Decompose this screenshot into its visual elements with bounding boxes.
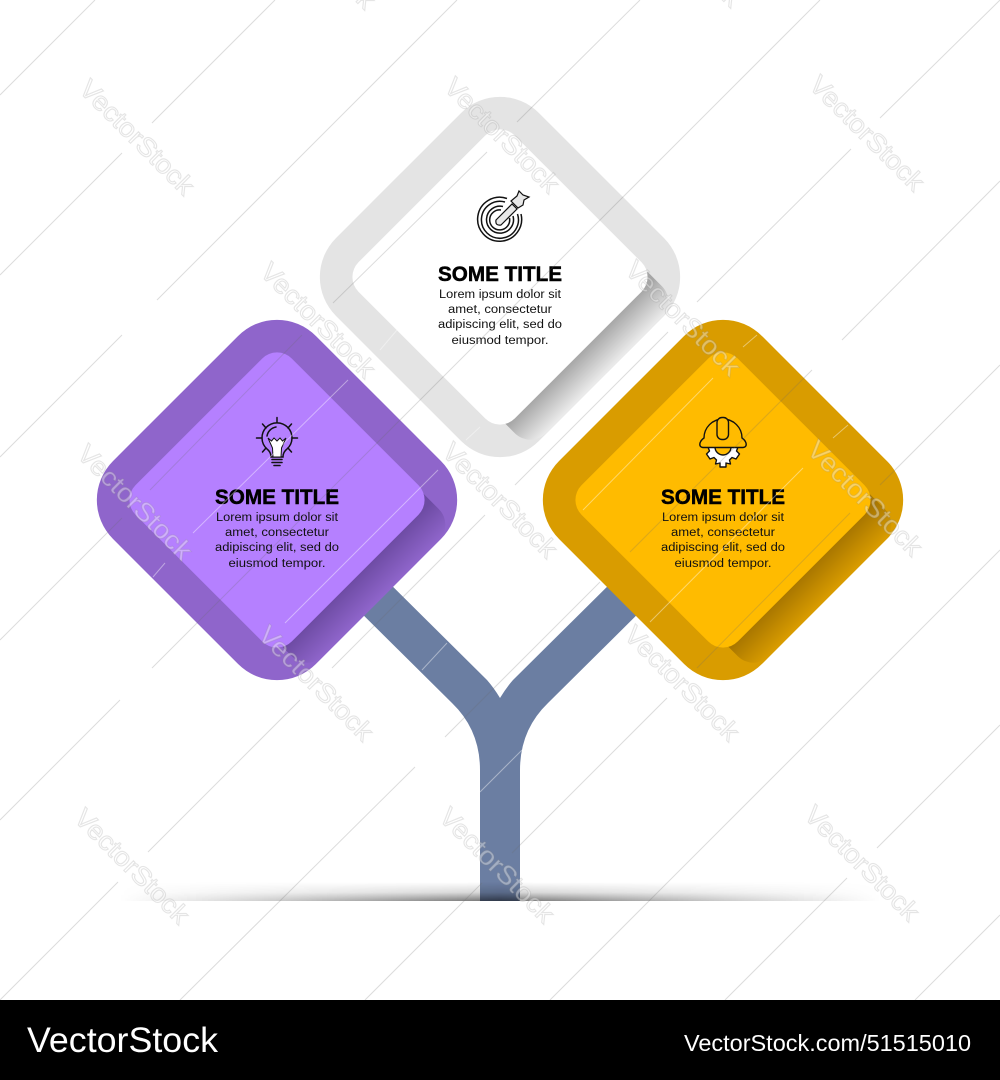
ground shadow (146, 884, 854, 901)
watermarks: VectorStock (801, 434, 929, 562)
inner shadow (249, 466, 454, 672)
panel: amber diamond (520, 297, 926, 703)
inner shadow (695, 466, 900, 672)
body (215, 512, 339, 570)
heading: SOME TITLE (438, 263, 562, 286)
body: amet, consectetur (448, 304, 552, 316)
body: amet, consectetur (671, 527, 775, 539)
text: right card (661, 486, 785, 570)
body: Lorem ipsum dolor sit (216, 512, 339, 524)
watermarks: VectorStock (798, 799, 926, 927)
body (661, 512, 785, 570)
inner shadow (472, 243, 677, 449)
watermarks: VectorStock (68, 802, 196, 930)
icon: light bulb (256, 418, 298, 466)
panel: grey diamond (297, 74, 703, 480)
icon: helmet and gear (700, 418, 746, 467)
watermarks: VectorStock (438, 71, 566, 199)
icon: target with arrow (478, 191, 529, 241)
body: Lorem ipsum dolor sit (439, 289, 562, 301)
watermarks: VectorStock (619, 254, 747, 382)
text: left card (215, 486, 339, 570)
watermarks: VectorStock (73, 73, 201, 201)
body: amet, consectetur (225, 527, 329, 539)
outer frame (297, 74, 703, 480)
body (438, 289, 562, 347)
watermarks: VectorStock (618, 619, 746, 747)
body: eiusmod tempor. (674, 558, 772, 570)
inner card (344, 121, 656, 433)
body: adipiscing elit, sed do (661, 542, 785, 554)
panel: purple diamond (74, 297, 480, 703)
footer bar (0, 1000, 1000, 1080)
watermarks: VectorStock (252, 619, 380, 747)
footer url: VectorStock.com/51515010 (684, 1030, 971, 1056)
watermarks (68, 0, 931, 930)
body: eiusmod tempor. (452, 335, 548, 347)
body: adipiscing elit, sed do (438, 319, 562, 331)
inner card (121, 344, 433, 656)
heading: SOME TITLE (215, 486, 339, 509)
outer frame (520, 297, 926, 703)
body: Lorem ipsum dolor sit (662, 512, 785, 524)
watermarks: VectorStock (254, 256, 382, 384)
watermarks: VectorStock (433, 801, 561, 929)
body: adipiscing elit, sed do (215, 542, 339, 554)
watermarks: VectorStock (803, 69, 931, 197)
inner card (567, 344, 879, 656)
outer frame (74, 297, 480, 703)
connector stem (343, 567, 657, 901)
footer logo: VectorStock (27, 1021, 219, 1060)
heading: SOME TITLE (661, 486, 785, 509)
body: eiusmod tempor. (228, 558, 326, 570)
watermarks: VectorStock (71, 438, 199, 566)
watermarks: VectorStock (436, 436, 564, 564)
text: top card (438, 263, 562, 347)
